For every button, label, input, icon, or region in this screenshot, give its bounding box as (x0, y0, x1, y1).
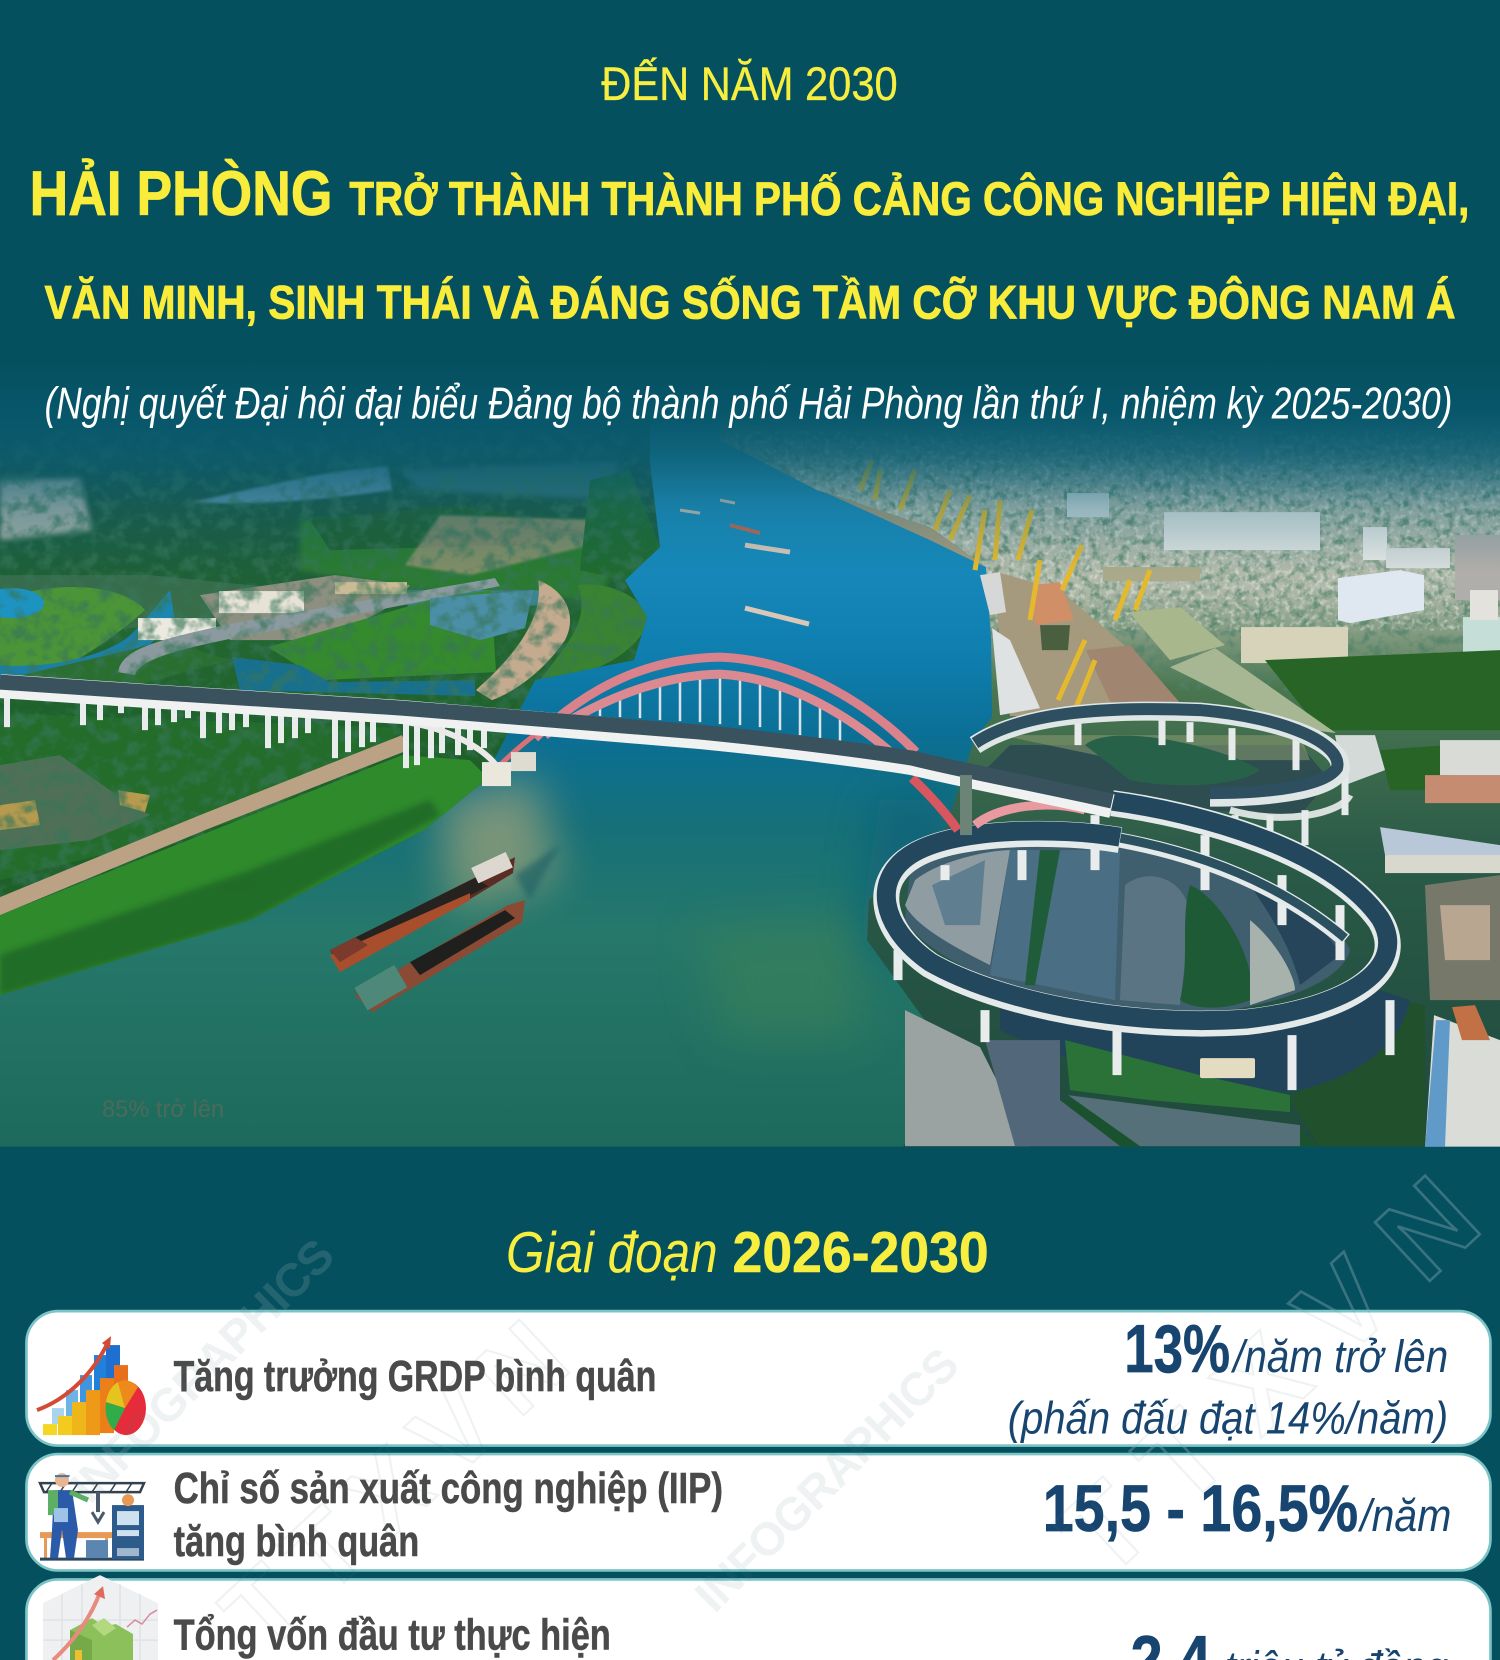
label: Tăng trưởng GRDP bình quân (174, 1353, 656, 1401)
bridge tower pier (960, 775, 972, 835)
icon: bar chart with pie (37, 1336, 146, 1435)
small spiral ramp (975, 709, 1350, 845)
aerial photo: Hoàng Văn Thụ bridge and Cấm river (0, 380, 1500, 1147)
interchange plaza and roads (898, 815, 1390, 1146)
right river bank city (720, 380, 1500, 1147)
distant boats (680, 500, 809, 624)
barge 1 (330, 852, 515, 972)
panel: total investment (26, 1575, 1490, 1660)
left bank details (0, 462, 660, 909)
watermark over panels (60, 1152, 1500, 1660)
top fade over photo (0, 360, 1500, 572)
approach columns (7, 698, 484, 768)
title: HẢI PHÒNG (30, 158, 332, 229)
bridge lower arch and piers (409, 724, 538, 786)
value: /năm (1358, 1490, 1451, 1541)
riverside road (0, 735, 408, 915)
watermark on background: INFOGRAPHICS (60, 1229, 344, 1512)
value: (phấn đấu đạt 14%/năm) (1008, 1392, 1448, 1443)
value: 15,5 - 16,5% (1043, 1472, 1358, 1545)
land texture (0, 469, 660, 909)
panel: GRDP growth (26, 1311, 1490, 1446)
lower level ramp (1000, 990, 1410, 1092)
icon: factory worker (40, 1473, 144, 1559)
watermark on background (60, 1152, 1500, 1601)
heading: kicker: ĐẾN NĂM 2030 (601, 57, 898, 111)
left river bank land (0, 380, 660, 995)
section heading: period (506, 1221, 989, 1285)
section heading: period: Giai đoạn (506, 1221, 718, 1285)
city texture (766, 446, 1500, 690)
stray label in photo: 85% trở lên (102, 1096, 224, 1123)
port and warehouses (820, 460, 1336, 733)
bridge hangers (600, 675, 840, 742)
barge 2 (354, 900, 525, 1012)
value (1131, 1623, 1448, 1660)
label: tăng bình quân (174, 1518, 419, 1566)
bridge deck (0, 682, 1112, 806)
value: /năm trở lên (1231, 1331, 1448, 1382)
big spiral interchange ramp (886, 801, 1388, 1024)
label (174, 1465, 723, 1566)
bridge arch (535, 657, 958, 830)
watermark over panels: INFOGRAPHICS (60, 1229, 344, 1512)
label: Tổng vốn đầu tư thực hiện (174, 1611, 611, 1659)
value: 13% (1124, 1312, 1230, 1387)
barge wakes and shadows (515, 845, 560, 900)
panel: IIP (26, 1454, 1490, 1570)
city buildings (1060, 425, 1500, 1147)
watermark over panels: TTXVN (1035, 1152, 1500, 1601)
title (30, 158, 1469, 330)
value (1008, 1312, 1448, 1443)
riverside vegetation (0, 755, 490, 995)
section heading: period: 2026-2030 (733, 1221, 989, 1285)
label: Chỉ số sản xuất công nghiệp (IIP) (174, 1465, 723, 1513)
river reflections (440, 775, 960, 1040)
watermark over panels: INFOGRAPHICS (685, 1338, 969, 1621)
watermark on background: TTXVN (1035, 1152, 1500, 1601)
icon: money bars with arrow (43, 1575, 158, 1660)
river (0, 436, 992, 1146)
